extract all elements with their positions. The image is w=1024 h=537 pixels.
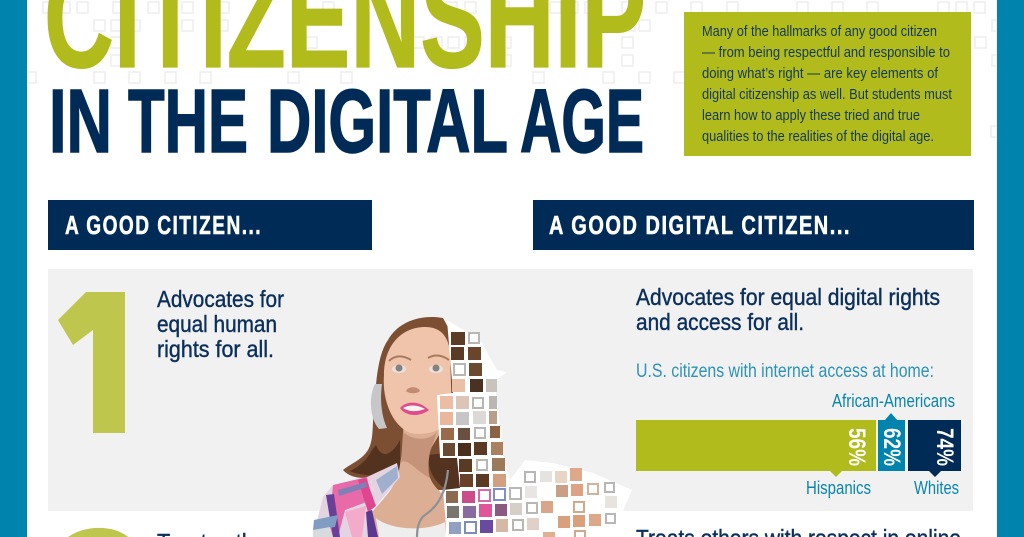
side band: right xyxy=(997,0,1024,537)
title line: in the digital age: THE xyxy=(128,72,248,172)
text: advocates for equal digital rights: and access for all. xyxy=(636,309,804,335)
mosaic backing shape xyxy=(437,320,633,537)
bar: african-americans: African-Americans xyxy=(832,391,955,411)
bar: hispanics: 56% xyxy=(843,428,870,466)
bar: whites: Whites xyxy=(914,478,959,498)
title line: in the digital age: AGE xyxy=(520,72,644,172)
eyebrows xyxy=(389,356,449,361)
heading: a good digital citizen: A GOOD DIGITAL CITIZEN... xyxy=(549,210,851,240)
hair shadow xyxy=(350,440,470,490)
nose xyxy=(406,387,420,393)
neck and chest xyxy=(372,425,447,537)
bar: whites xyxy=(908,420,961,498)
heading: a good digital citizen xyxy=(533,200,974,250)
intro callout: Many of the hallmarks of any good citizen xyxy=(702,23,937,40)
headphone xyxy=(371,384,387,429)
text: advocates for equal human rights: equal human xyxy=(157,311,277,337)
headphone wire xyxy=(417,470,448,537)
neck shadow xyxy=(401,432,437,478)
hair xyxy=(343,317,470,490)
eyes xyxy=(392,364,443,373)
intro callout: digital citizenship as well. But students must xyxy=(702,86,953,103)
chart subtitle: U.S. citizens with internet access at home: xyxy=(636,360,934,382)
bar: whites: 74% xyxy=(931,428,958,466)
text: advocates for equal human rights: Advocates for xyxy=(157,286,284,312)
text: advocates for equal human rights xyxy=(157,286,284,362)
number 1: 1 xyxy=(51,211,164,489)
text: advocates for equal human rights: rights for all. xyxy=(157,336,274,362)
bar: hispanics xyxy=(636,420,876,498)
mouth xyxy=(400,403,429,415)
text: advocates for equal digital rights: Advocates for equal digital rights xyxy=(636,284,940,310)
bar: hispanics: Hispanics xyxy=(806,478,871,498)
heading: a good citizen xyxy=(48,200,372,250)
white top xyxy=(376,518,445,537)
text: advocates for equal digital rights xyxy=(636,284,940,335)
bar chart: internet access xyxy=(636,391,961,498)
photo: girl with headphones dissolving into pixels xyxy=(313,317,633,537)
title line: in the digital age: IN xyxy=(49,72,112,172)
intro callout: — from being respectful and responsible to xyxy=(702,44,950,61)
side band: left xyxy=(0,0,27,537)
intro callout: learn how to apply these tried and true xyxy=(702,107,920,124)
bar: african-americans xyxy=(832,391,955,471)
intro callout: doing what’s right — are key elements of xyxy=(702,65,939,82)
bar: african-americans: 62% xyxy=(878,428,905,466)
title xyxy=(44,0,646,172)
heading: a good citizen: A GOOD CITIZEN... xyxy=(65,210,262,240)
panel: row 1 background xyxy=(48,269,973,511)
face xyxy=(384,327,452,434)
title line: in the digital age xyxy=(49,72,644,172)
mosaic tiles xyxy=(440,332,617,537)
title line: in the digital age: DIGITAL xyxy=(267,72,508,172)
intro callout xyxy=(684,12,971,156)
shirt xyxy=(313,463,400,537)
intro callout: qualities to the realities of the digital age. xyxy=(702,128,934,145)
